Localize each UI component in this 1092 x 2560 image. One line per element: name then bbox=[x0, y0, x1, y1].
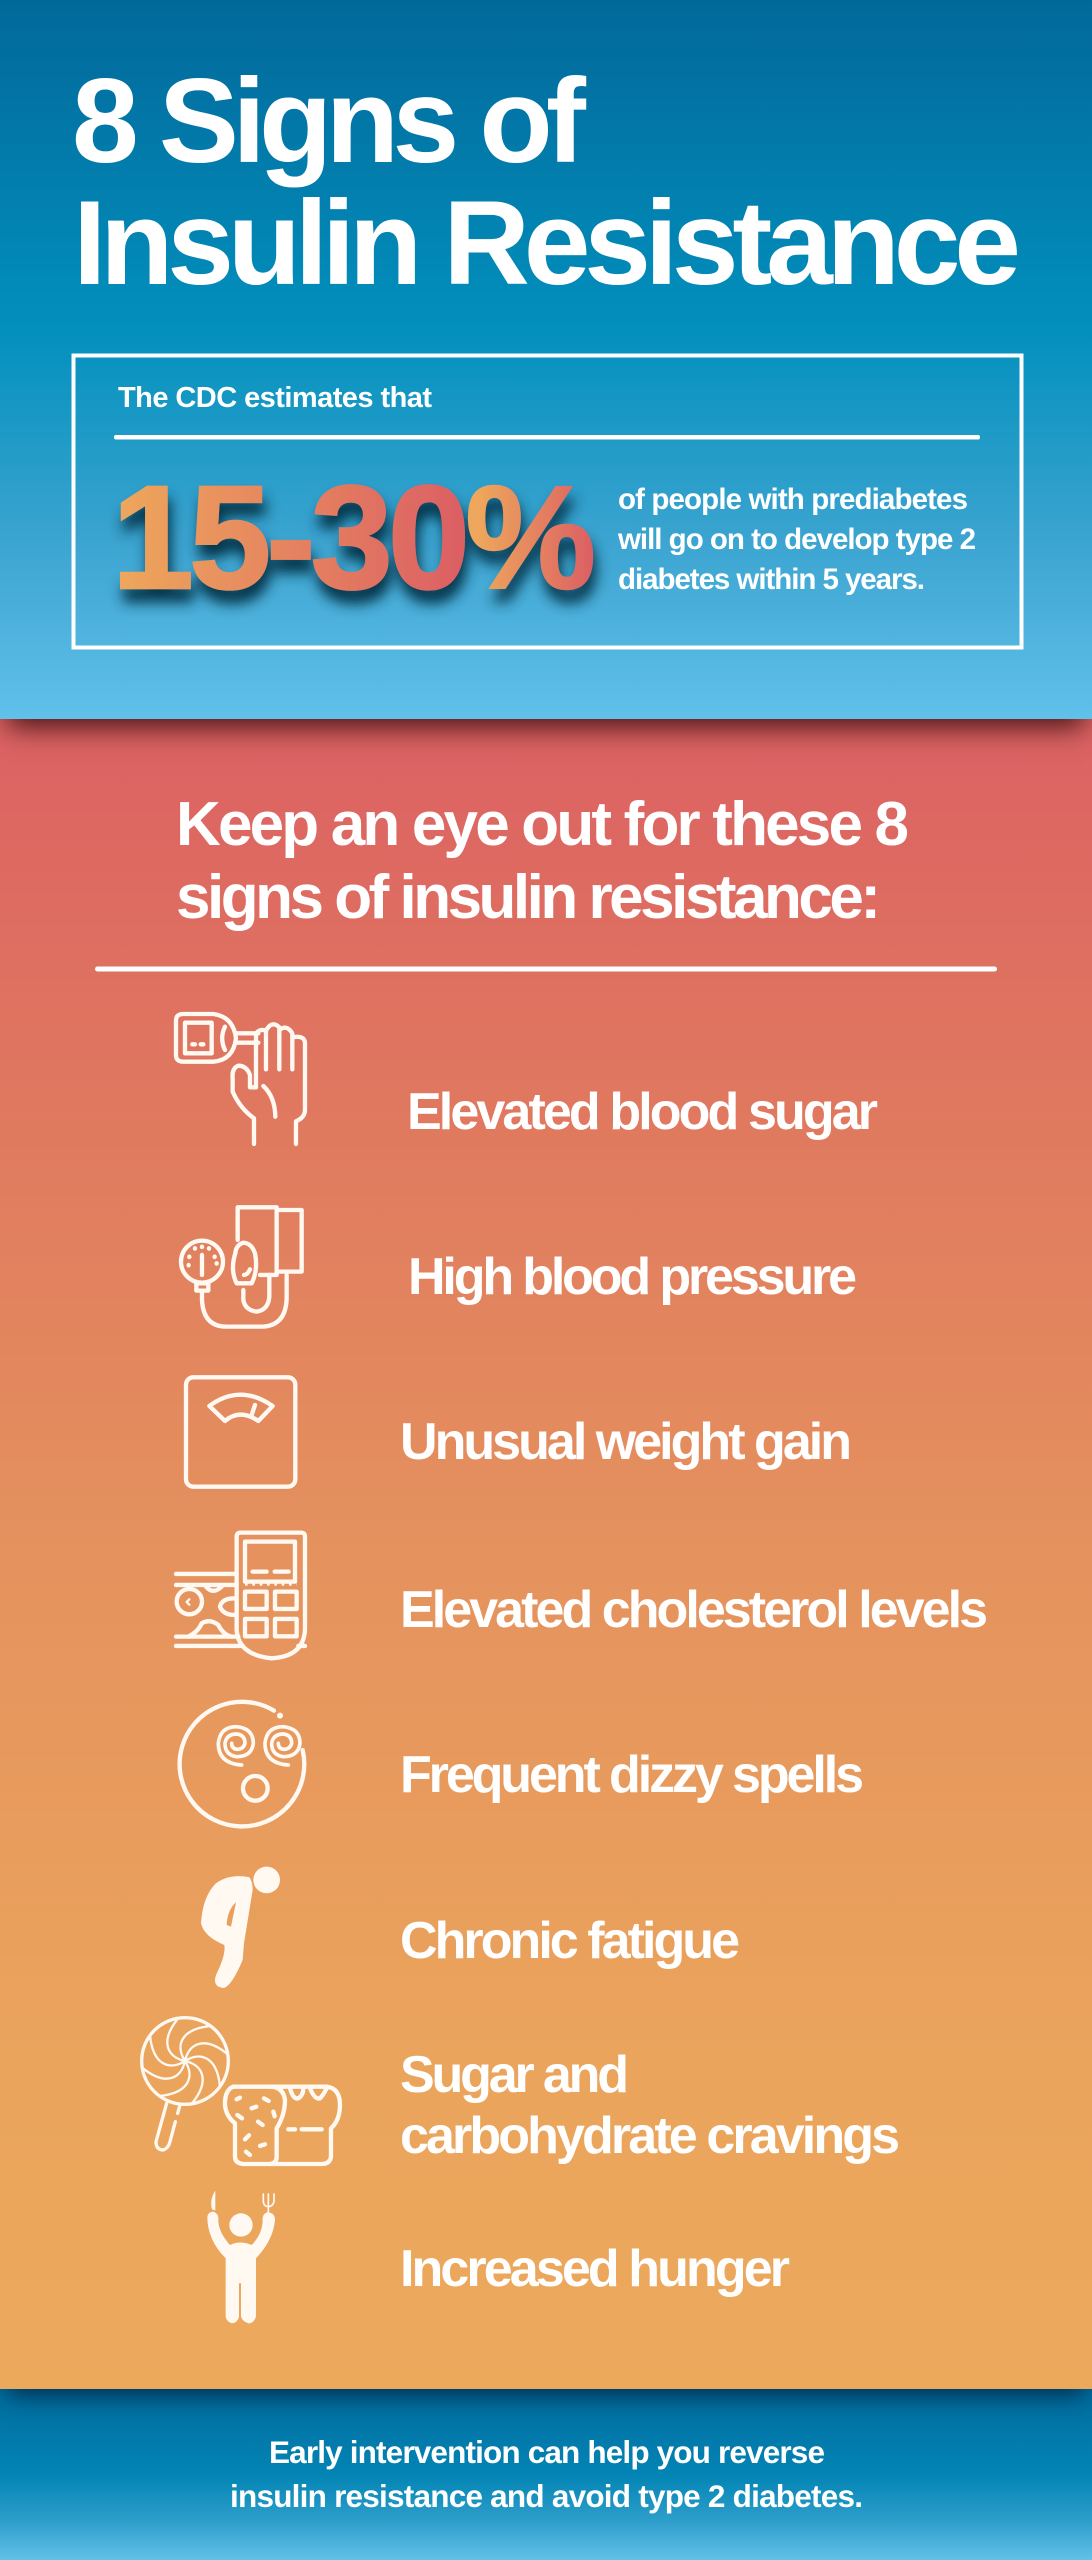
statistic description: of people with prediabetes bbox=[618, 483, 968, 516]
statistic description bbox=[617, 483, 976, 596]
heading: keep an eye out: Keep an eye out for these 8 bbox=[176, 790, 909, 859]
heading: keep an eye out bbox=[176, 790, 909, 932]
footer text bbox=[230, 2434, 863, 2514]
icon: blood pressure cuff bbox=[181, 1207, 302, 1327]
title bbox=[72, 54, 1021, 310]
footer text: insulin resistance and avoid type 2 diabetes. bbox=[230, 2478, 863, 2514]
icon: glucose meter and hand bbox=[176, 1014, 305, 1144]
big number: 15-30%: 15-30% bbox=[112, 456, 596, 620]
label: elevated blood sugar: Elevated blood sugar bbox=[407, 1083, 878, 1141]
icon: hungry figure with knife and fork bbox=[207, 2191, 275, 2323]
icon: cholesterol meter and artery bbox=[176, 1533, 305, 1658]
statistic intro text: The CDC estimates that bbox=[118, 382, 432, 414]
label: chronic fatigue: Chronic fatigue bbox=[400, 1912, 740, 1970]
heading: keep an eye out: signs of insulin resistance: bbox=[176, 863, 881, 932]
icon: dizzy face bbox=[180, 1702, 304, 1826]
footer text: Early intervention can help you reverse bbox=[269, 2434, 825, 2470]
label: sugar and carbohydrate cravings: Sugar and bbox=[400, 2046, 629, 2104]
label: high blood pressure: High blood pressure bbox=[408, 1248, 857, 1306]
label: sugar and carbohydrate cravings: carbohydrate cravings bbox=[400, 2107, 900, 2165]
label: sugar and carbohydrate cravings bbox=[400, 2046, 900, 2165]
statistic description: will go on to develop type 2 bbox=[617, 523, 976, 556]
label: increased hunger: Increased hunger bbox=[400, 2240, 790, 2298]
statistic description: diabetes within 5 years. bbox=[618, 563, 925, 596]
panel: CDC statistic box bbox=[74, 356, 1022, 648]
title: Insulin Resistance bbox=[73, 176, 1021, 310]
label: elevated cholesterol levels: Elevated cholesterol levels bbox=[400, 1581, 988, 1639]
icon: weighing scale bbox=[186, 1377, 295, 1487]
label: unusual weight gain: Unusual weight gain bbox=[400, 1413, 852, 1471]
icon: fatigued figure bbox=[201, 1867, 280, 1988]
panel: footer background bbox=[0, 2389, 1092, 2560]
panel: signs background bbox=[0, 719, 1092, 2389]
panel: header background bbox=[0, 0, 1092, 719]
lollipop bbox=[142, 2018, 228, 2150]
icon: lollipop and bread bbox=[142, 2018, 340, 2164]
bread bbox=[225, 2087, 340, 2164]
title: 8 Signs of bbox=[72, 54, 587, 188]
label: frequent dizzy spells: Frequent dizzy spells bbox=[400, 1746, 864, 1804]
